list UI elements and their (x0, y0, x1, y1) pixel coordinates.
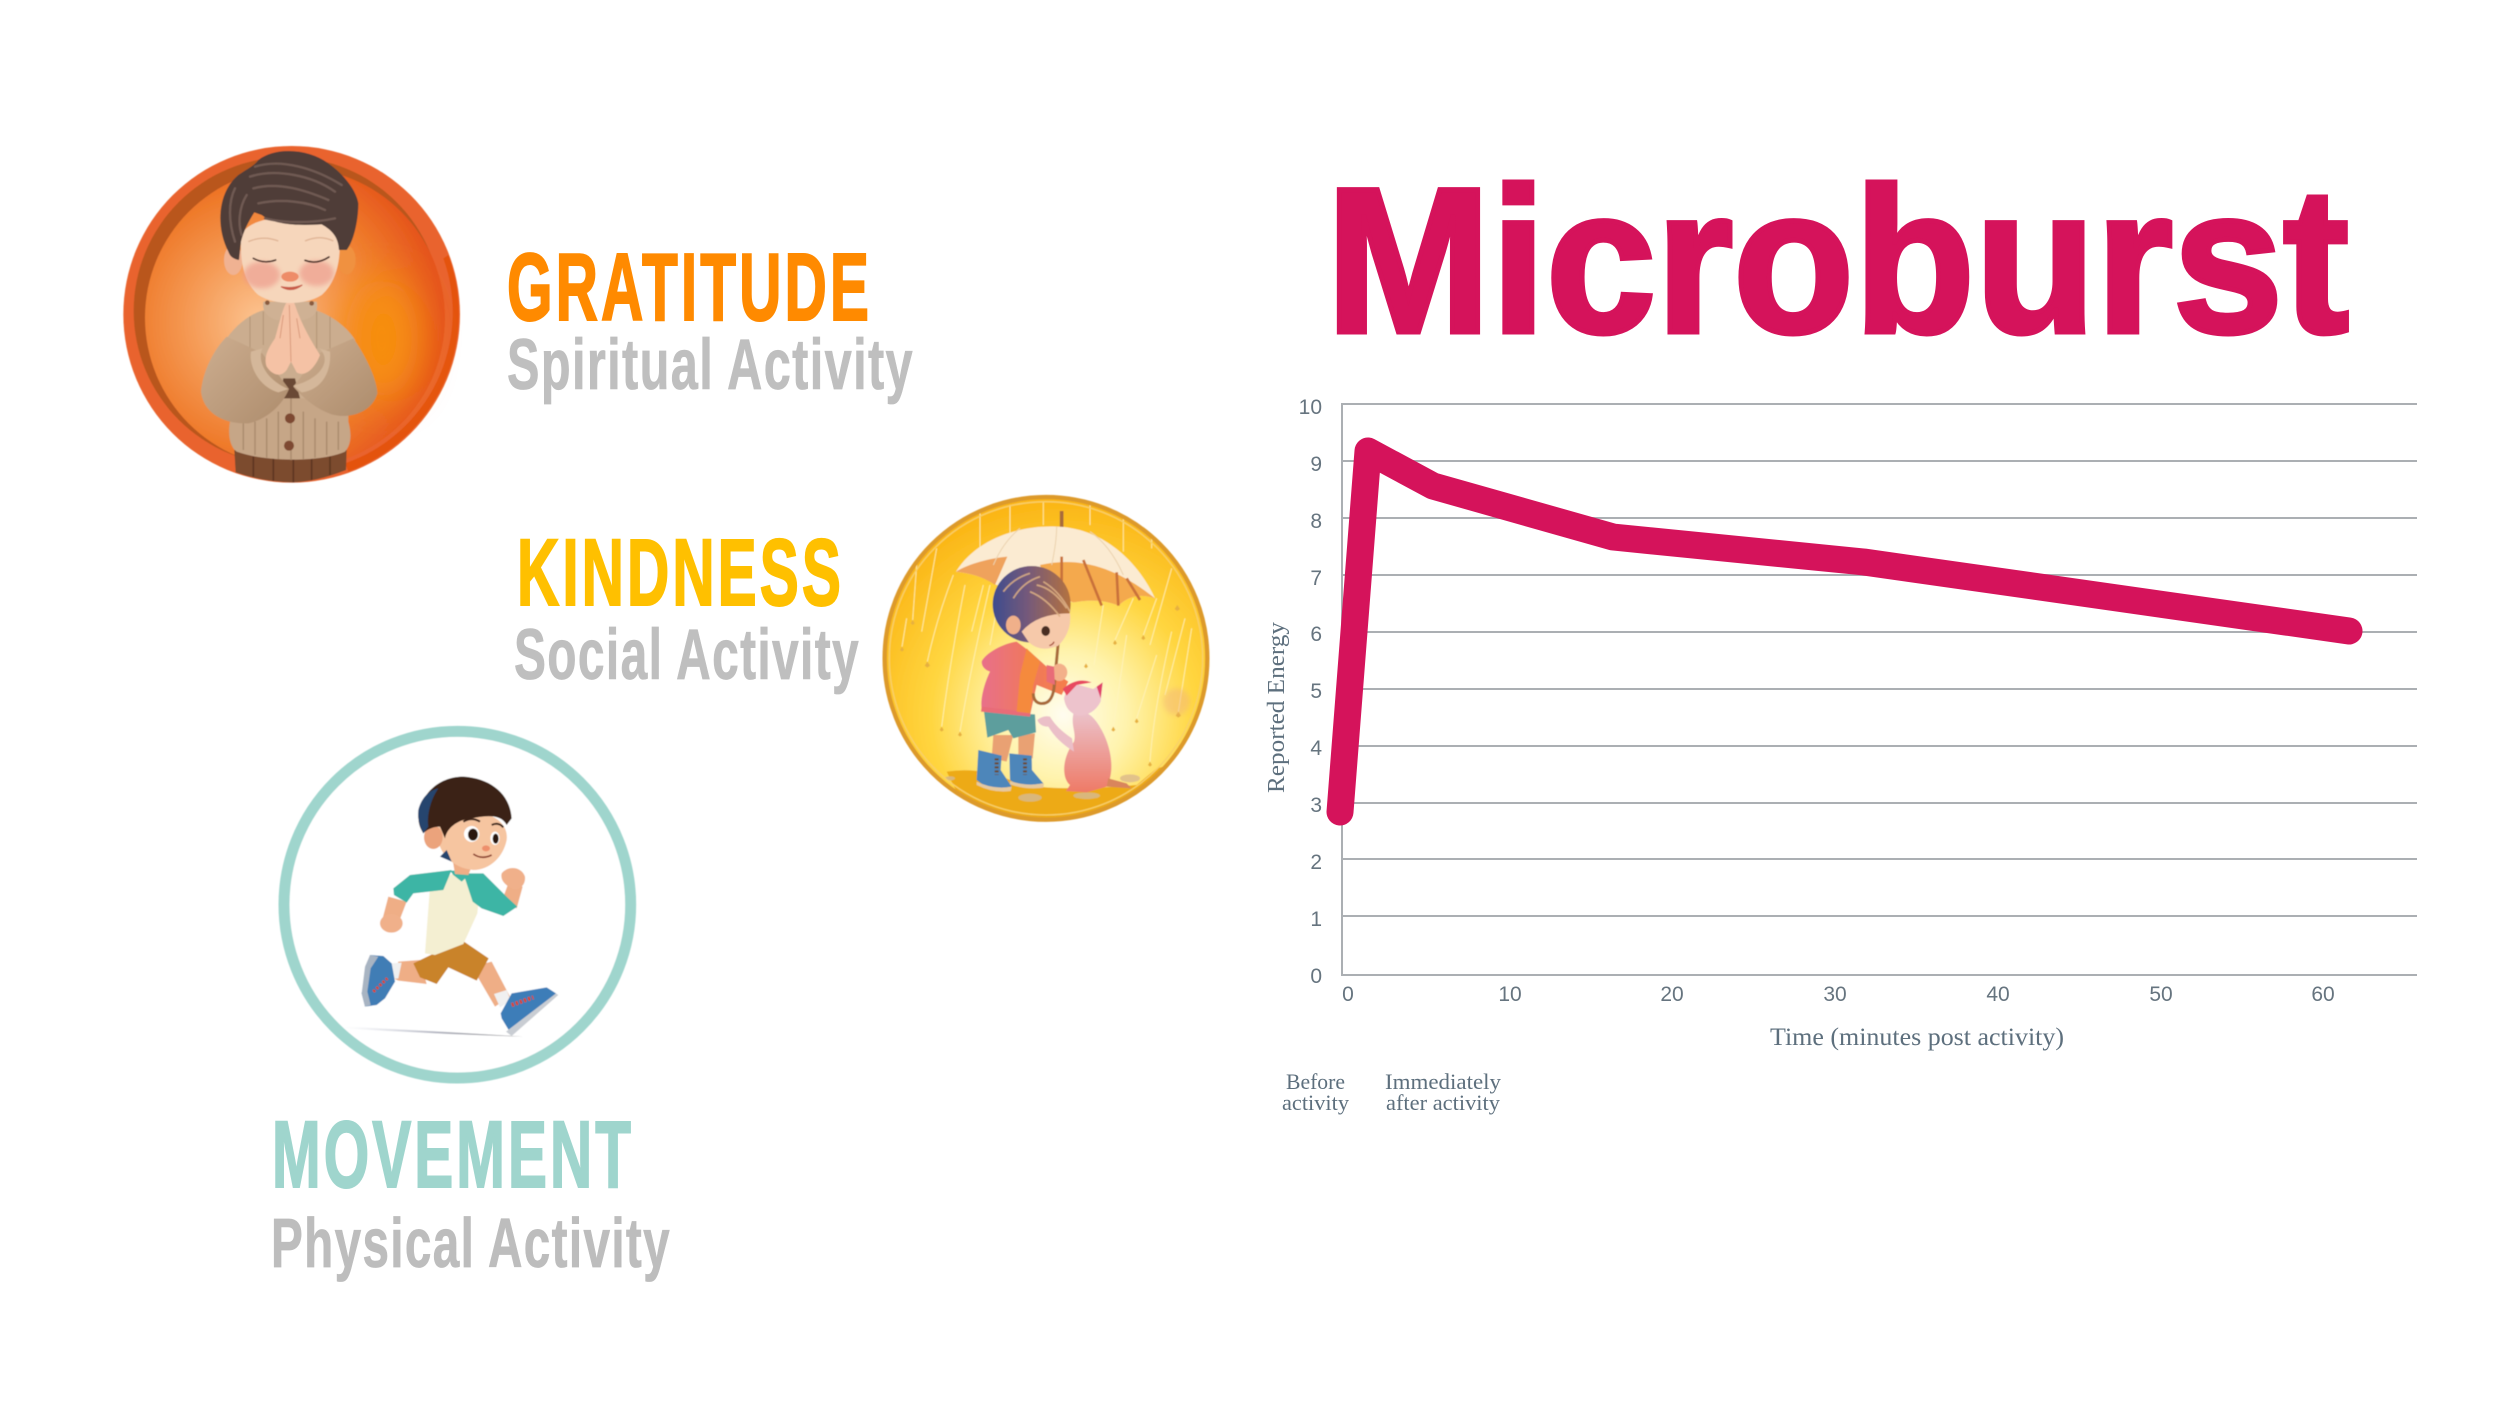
y axis tick labels: 8 (1310, 510, 1322, 533)
x axis tick labels: 60 (2311, 983, 2335, 1006)
y axis tick labels: 1 (1310, 908, 1322, 931)
shorts (413, 940, 489, 984)
shorts (984, 712, 1036, 738)
handle (1033, 642, 1058, 703)
y axis tick labels: 5 (1310, 680, 1322, 703)
title: Microburst (1326, 145, 2349, 376)
heading: movement (271, 1102, 671, 1282)
icon: movement, running child in teal ring (284, 731, 631, 1078)
head (453, 860, 472, 875)
x axis tick labels (1342, 983, 2335, 1006)
subheading: physical activity: Physical Activity (271, 1204, 671, 1282)
y axis tick labels: 0 (1310, 965, 1322, 988)
x axis title: Time (minutes post activity) (1770, 1024, 2064, 1051)
hair (220, 151, 358, 260)
hair and face (993, 566, 1071, 643)
y axis title: Reported Energy (1264, 622, 1290, 793)
icon: kindness, child with umbrella and cat in golden circle (883, 495, 1209, 822)
subheading: social activity: Social Activity (514, 616, 860, 695)
heading: kindness (514, 520, 860, 695)
y axis tick labels: 6 (1310, 623, 1322, 646)
heading: gratitude (507, 234, 914, 405)
annotation: before activity: Before (1286, 1069, 1345, 1094)
sleeves (201, 337, 289, 423)
sweater (229, 388, 350, 460)
line chart: reported energy over time (1264, 396, 2417, 1115)
sleeves (393, 870, 452, 903)
annotation: before activity: activity (1282, 1090, 1349, 1115)
x axis tick labels: 40 (1986, 983, 2010, 1006)
buttons (285, 413, 295, 423)
x axis tick labels: 20 (1660, 983, 1684, 1006)
face (241, 217, 340, 303)
heading: kindness: KINDNESS (517, 520, 844, 626)
heading: gratitude: GRATITUDE (507, 234, 872, 341)
shirt (425, 873, 480, 955)
x axis tick labels: 0 (1342, 983, 1354, 1006)
hair (418, 777, 512, 838)
subheading: spiritual activity: Spiritual Activity (507, 326, 914, 405)
data line (1340, 451, 2349, 812)
arms (383, 897, 407, 923)
annotation: immediately after activity: Immediately (1385, 1069, 1501, 1094)
y axis tick labels: 2 (1310, 851, 1322, 874)
y axis tick labels (1299, 396, 1322, 988)
pants (234, 450, 347, 482)
annotation: before activity (1282, 1069, 1349, 1115)
back leg and shoe (393, 960, 427, 984)
annotation: immediately after activity: after activity (1386, 1090, 1500, 1115)
y axis tick labels: 7 (1310, 567, 1322, 590)
icon: gratitude, praying child in orange circle (123, 146, 460, 483)
x axis tick labels: 50 (2149, 983, 2173, 1006)
y axis tick labels: 3 (1310, 794, 1322, 817)
legs and boots (992, 733, 1035, 762)
x axis tick labels: 30 (1823, 983, 1847, 1006)
rain (902, 502, 1192, 762)
cat (1064, 711, 1111, 792)
collar (263, 302, 317, 320)
puddle (947, 765, 1170, 818)
coat (981, 642, 1068, 716)
annotation: immediately after activity (1385, 1069, 1501, 1115)
y axis tick labels: 10 (1299, 396, 1322, 419)
ears (224, 245, 243, 275)
heading: movement: MOVEMENT (272, 1102, 634, 1208)
umbrella (1056, 511, 1067, 528)
x axis tick labels: 10 (1498, 983, 1522, 1006)
y axis tick labels: 4 (1310, 737, 1322, 760)
praying hands (266, 300, 320, 375)
eyes and smile (464, 826, 479, 842)
y axis tick labels: 9 (1310, 453, 1322, 476)
front leg and shoe (472, 962, 510, 1007)
